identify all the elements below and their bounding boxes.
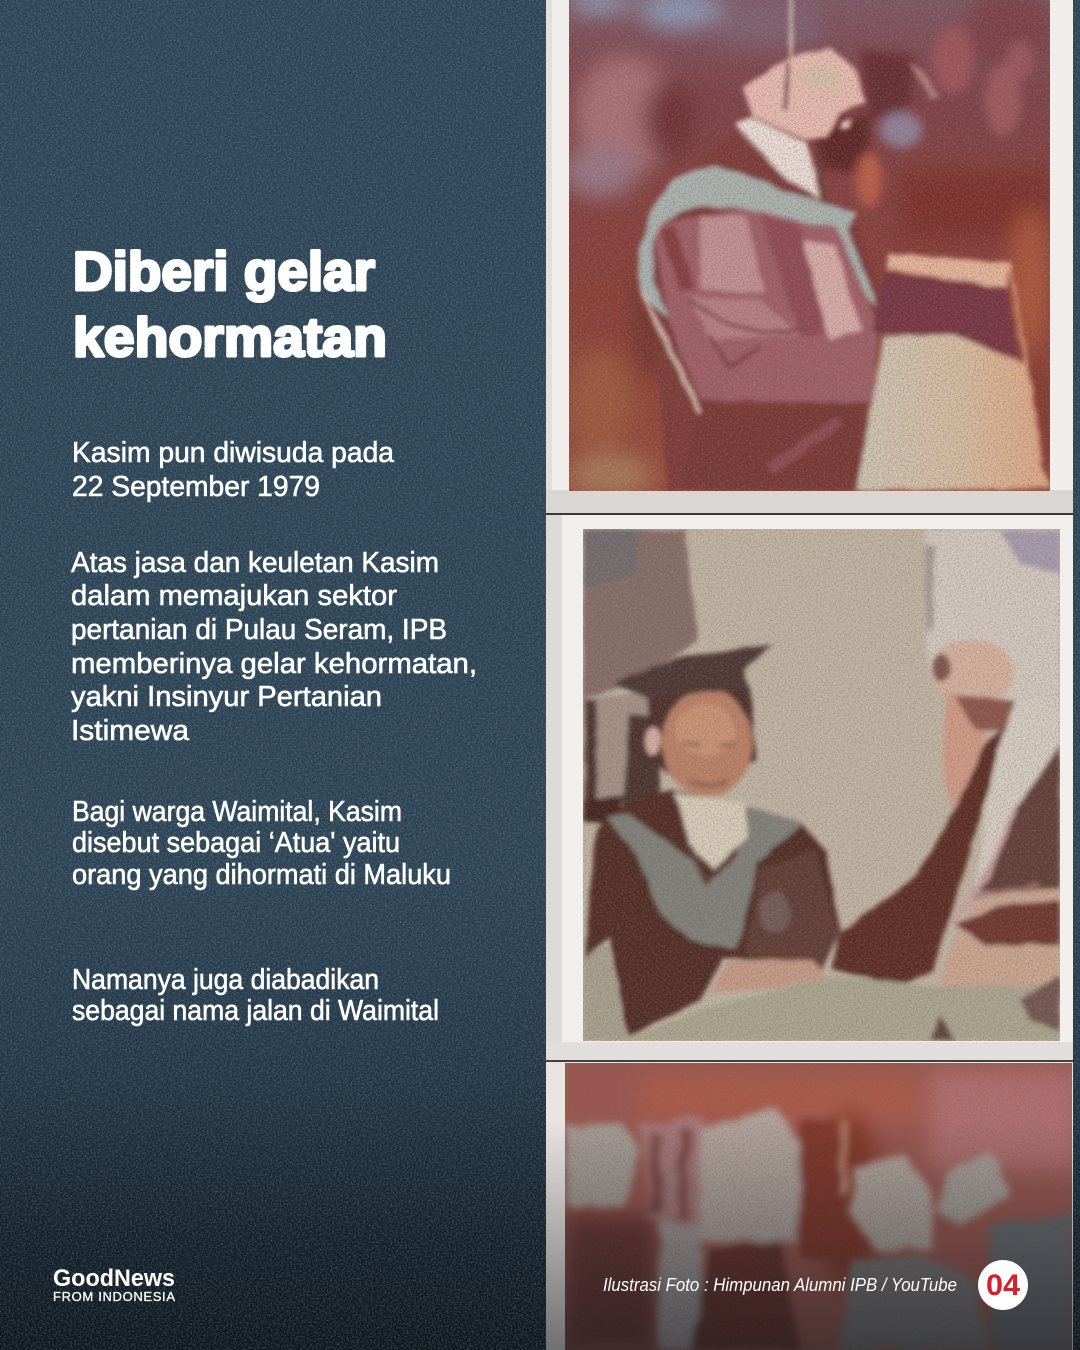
text block: honorary title: dalam memajukan sektor	[71, 580, 397, 612]
text block: street name	[72, 964, 439, 1027]
logo: GoodNews from Indonesia	[53, 1265, 175, 1304]
text block: graduation date	[72, 437, 395, 503]
text block: Atua: disebut sebagai ‘Atua' yaitu	[72, 827, 400, 859]
collar	[735, 117, 820, 200]
text block: honorary title: pertanian di Pulau Seram, IPB	[71, 614, 447, 646]
title: Diberi gelar	[73, 240, 375, 302]
table	[623, 976, 1060, 1041]
text block: street name: sebagai nama jalan di Waimital	[72, 995, 439, 1027]
diploma	[856, 334, 1050, 491]
robe	[650, 130, 885, 491]
text block: honorary title: Atas jasa dan keuletan Kasim	[71, 547, 439, 579]
book	[887, 253, 1010, 288]
pink arm	[943, 692, 985, 812]
page number badge: 04	[986, 1269, 1020, 1302]
person at right	[925, 529, 1060, 741]
hair	[647, 687, 756, 790]
text block: graduation date: 22 September 1979	[72, 471, 320, 503]
photo 2: young graduate shaking hands	[546, 513, 1073, 1062]
hood	[607, 807, 803, 950]
bottom shade over photos	[546, 1120, 1073, 1350]
shirt	[675, 793, 747, 870]
text block: honorary title	[71, 547, 477, 747]
logo: GoodNews from Indonesia: GoodNews	[53, 1265, 175, 1292]
face	[662, 689, 752, 797]
photo 1: graduate in profile	[546, 0, 1073, 513]
mortarboard	[613, 645, 773, 700]
title	[73, 240, 387, 368]
text block: honorary title: yakni Insinyur Pertanian	[71, 681, 382, 713]
text block: honorary title: memberinya gelar kehormatan,	[71, 648, 477, 680]
text block: Atua: orang yang dihormati di Maluku	[72, 859, 451, 891]
text block: graduation date: Kasim pun diwisuda pada	[72, 437, 395, 469]
pale shirt	[975, 700, 1060, 895]
heads	[850, 1155, 935, 1250]
hood	[638, 167, 878, 317]
chair	[584, 692, 648, 806]
photo credit: Ilustrasi Foto : Himpunan Alumni IPB / YouTube	[603, 1274, 957, 1295]
logo: GoodNews from Indonesia: FROM INDONESIA	[53, 1289, 175, 1304]
page number badge	[978, 1260, 1028, 1310]
photo 3: crowd at ceremony	[546, 1062, 1080, 1350]
right robe	[975, 745, 1060, 892]
title: kehormatan	[73, 306, 387, 368]
text block: street name: Namanya juga diabadikan	[72, 964, 379, 996]
hand	[710, 960, 827, 993]
text block: Atua	[72, 796, 451, 891]
face	[743, 47, 865, 140]
text block: Atua: Bagi warga Waimital, Kasim	[72, 796, 402, 828]
extended sleeve	[832, 725, 1005, 986]
dark pillar	[583, 529, 698, 700]
text block: honorary title: Istimewa	[71, 715, 190, 747]
gown	[585, 790, 840, 1037]
